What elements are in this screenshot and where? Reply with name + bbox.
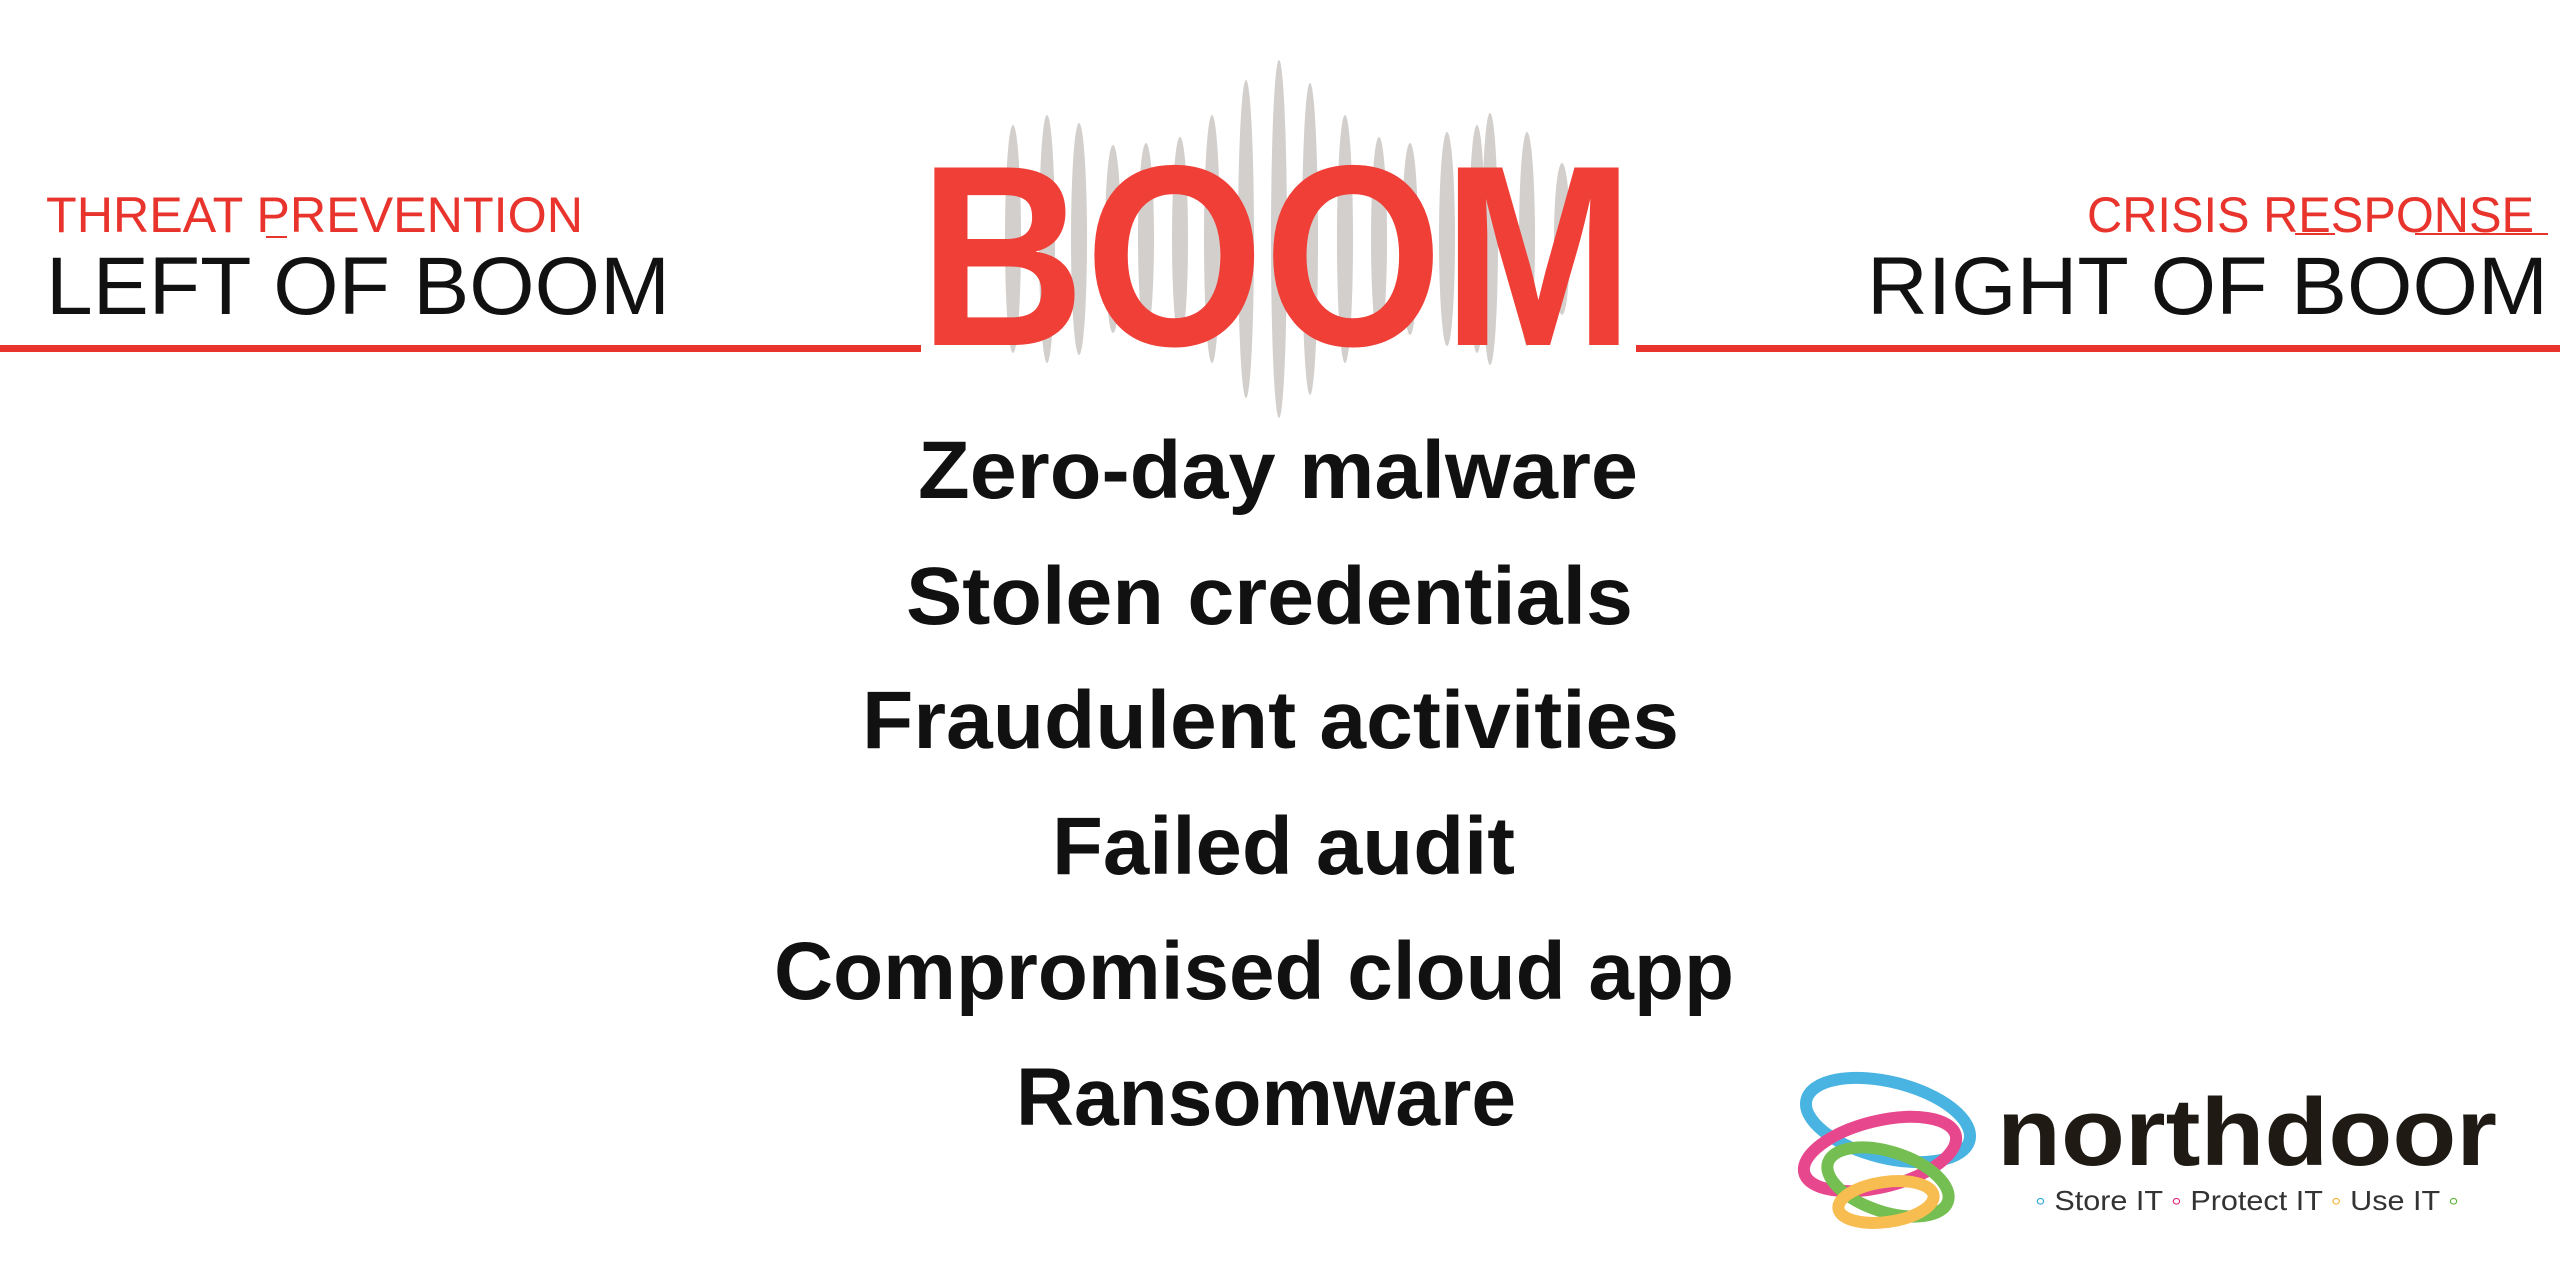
red timeline left — [0, 345, 921, 352]
list of incidents: Stolen credentials — [906, 551, 1633, 642]
heading left: threat prevention: LEFT OF BOOM — [46, 241, 670, 332]
heading left: threat prevention: THREAT PREVENTION — [46, 187, 583, 243]
list of incidents: Compromised cloud app — [774, 926, 1734, 1017]
logo: northdoor — [1796, 1063, 2497, 1230]
icon: rings — [1796, 1063, 1979, 1230]
heading right: crisis response — [1867, 187, 2548, 332]
list of incidents: Failed audit — [1052, 801, 1515, 892]
list of incidents: Fraudulent activities — [862, 675, 1679, 766]
heading right: crisis response: RIGHT OF BOOM — [1867, 241, 2548, 332]
list of incidents — [774, 425, 1734, 1143]
logo: northdoor: northdoor — [1997, 1079, 2497, 1186]
red timeline right — [1636, 345, 2560, 352]
waveform graphic — [1005, 60, 1570, 418]
list of incidents: Ransomware — [1016, 1052, 1516, 1143]
title: BOOM: BOOM — [919, 111, 1634, 400]
heading right: crisis response: CRISIS RESPONSE — [2087, 187, 2534, 243]
list of incidents: Zero-day malware — [918, 425, 1638, 516]
heading left: threat prevention — [46, 187, 670, 332]
logo: northdoor: ◦ Store IT ◦ Protect IT ◦ Use IT ◦ — [2035, 1185, 2459, 1216]
